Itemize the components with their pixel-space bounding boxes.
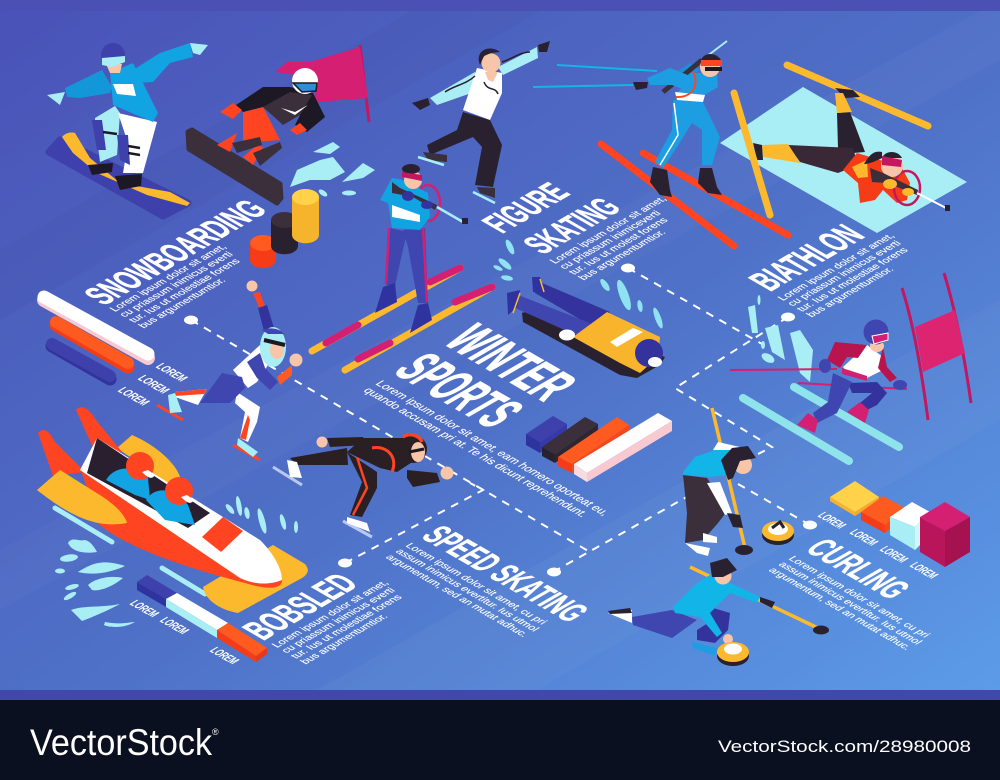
text block: winter sports: Lorem ipsum dolor sit amet, eam homero oporteat eu, [372,378,613,518]
chart: curling isometric blocks: LOREM [876,544,912,565]
text block: figure skating: bus argumentumtior. [577,229,669,282]
chart: snowboarding cylinders [250,189,319,268]
chart: bobsled stacked bar: LOREM [206,645,243,666]
text block: speed skating: argumentum, sed an mutat adhuc. [382,553,530,639]
footer: watermark band: ® [212,727,219,737]
chart: bobsled stacked bar [126,575,267,666]
footer: watermark band: VectorStock [30,722,212,763]
illustration: speed skater in black suit [273,435,454,537]
heading: figure skating: FIGURE [473,177,578,238]
illustration: bobsled [37,407,308,613]
illustration: skeleton slider [507,277,665,378]
icon: water splash left of bobsled [55,539,135,627]
heading: snowboarding: SNOWBOARDING [75,194,275,310]
icon: water drops around slider [493,238,665,329]
text block: biathlon: tur. Ius ut molestiae forens [795,247,911,314]
text block: bobsled: cu priassum inimicus everti [280,587,398,655]
text block: figure skating: cu priassum inimiceverti [558,210,664,271]
heading: figure skating [473,177,630,259]
icon: water drops right of bobsled [224,496,298,534]
chart: curling isometric blocks: LOREM [846,527,882,548]
text block: speed skating: assum inimicus evertitur. Ius utmol [392,548,541,633]
text block: winter sports: quando accusam pri at. Te his dicunt reprehendunt. [360,385,592,519]
text block: biathlon: cu priassum inimicus everti [786,240,904,308]
text block: curling: assum inimicus evertitur. Ius utmol [775,561,924,646]
icon: water splash near snowboarder [290,142,375,198]
text block: curling: Lorem ipsum dolor sit amet, cu pri [785,555,932,639]
chart: curling isometric blocks [814,481,970,581]
text block: bobsled: tur. Ius ut molestiae forens [289,594,405,661]
illustration: figure skater [412,41,550,203]
text block: curling: argumentum, sed an mutat adhuc. [765,566,913,652]
text block: biathlon: bus argumentumtior. [805,266,897,319]
chart: bobsled stacked bar: LOREM [126,598,163,619]
chart: snowboarding bars: LOREM [152,361,191,384]
chart: snowboarding bars: LOREM [134,373,173,396]
illustration: speed skater in white suit [157,280,302,460]
chart: snowboarding bars [44,297,191,408]
heading: biathlon: BIATHLON [741,219,874,297]
text block: figure skating: Lorem ipsum dolor sit amet, [548,195,670,266]
text block: speed skating: Lorem ipsum dolor sit amet, cu pri [402,542,549,626]
footer: watermark band: VectorStock.com/28980008 [718,737,971,756]
connector dashed lines [184,264,817,576]
chart: winter sports isometric bars [526,413,672,482]
heading: winter sports [381,316,591,436]
illustration: parallel slalom snowboarder and flag [188,45,369,203]
text block: snowboarding: cu priassum inimicus everti [118,251,236,319]
text block: figure skating: tur. Ius ut molest forens [567,217,671,277]
chart: curling isometric blocks: LOREM [814,510,850,531]
chart: bobsled stacked bar: LOREM [156,615,193,636]
text block: snowboarding: bus argumentumtior. [137,277,229,330]
text block: snowboarding: Lorem ipsum dolor sit amet, [108,243,230,314]
illustration: biathlon skier [533,41,788,246]
heading: curling: CURLING [797,533,919,604]
heading: winter sports: SPORTS [381,345,537,436]
heading: bobsled: BOBSLED [234,568,368,646]
illustration: standing curler with broom [683,408,756,556]
heading: winter sports: WINTER [431,316,591,409]
text block: bobsled: bus argumentumtior. [299,613,391,666]
heading: speed skating: SPEED SKATING [413,520,598,627]
illustration: centre biathlon skier [312,164,492,370]
illustration: sliding curler with broom [608,558,829,666]
illustration: prone biathlete on mat [720,65,967,233]
heading: figure skating: SKATING [514,192,630,259]
icon: water splash near alpine skier [748,295,813,382]
footer: watermark band [0,700,1000,780]
illustration: freestyle snowboarder [47,43,208,216]
icon: curling stone [762,521,794,545]
illustration: alpine skier with gate flag [730,273,971,461]
chart: snowboarding bars: LOREM [114,385,153,408]
text block: snowboarding: tur. Ius ut molestiae forens [127,258,243,325]
chart: curling isometric blocks: LOREM [906,560,942,581]
text block: bobsled: Lorem ipsum dolor sit amet, [270,579,392,650]
text block: biathlon: Lorem ipsum dolor sit amet, [776,232,898,303]
